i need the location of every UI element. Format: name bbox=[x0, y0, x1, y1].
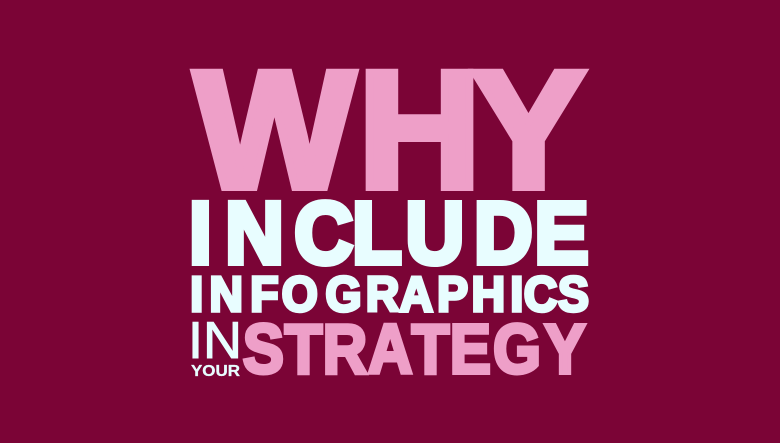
heading: INCLUDE: INCLUDE bbox=[189, 184, 589, 282]
heading: WHY: WHY bbox=[195, 37, 585, 223]
heading: STRATEGY: STRATEGY bbox=[243, 309, 586, 388]
heading: INFOGRAPHICS: INFOGRAPHICS bbox=[190, 268, 589, 323]
text: YOUR: YOUR bbox=[191, 363, 240, 380]
text: IN: IN bbox=[188, 312, 242, 370]
